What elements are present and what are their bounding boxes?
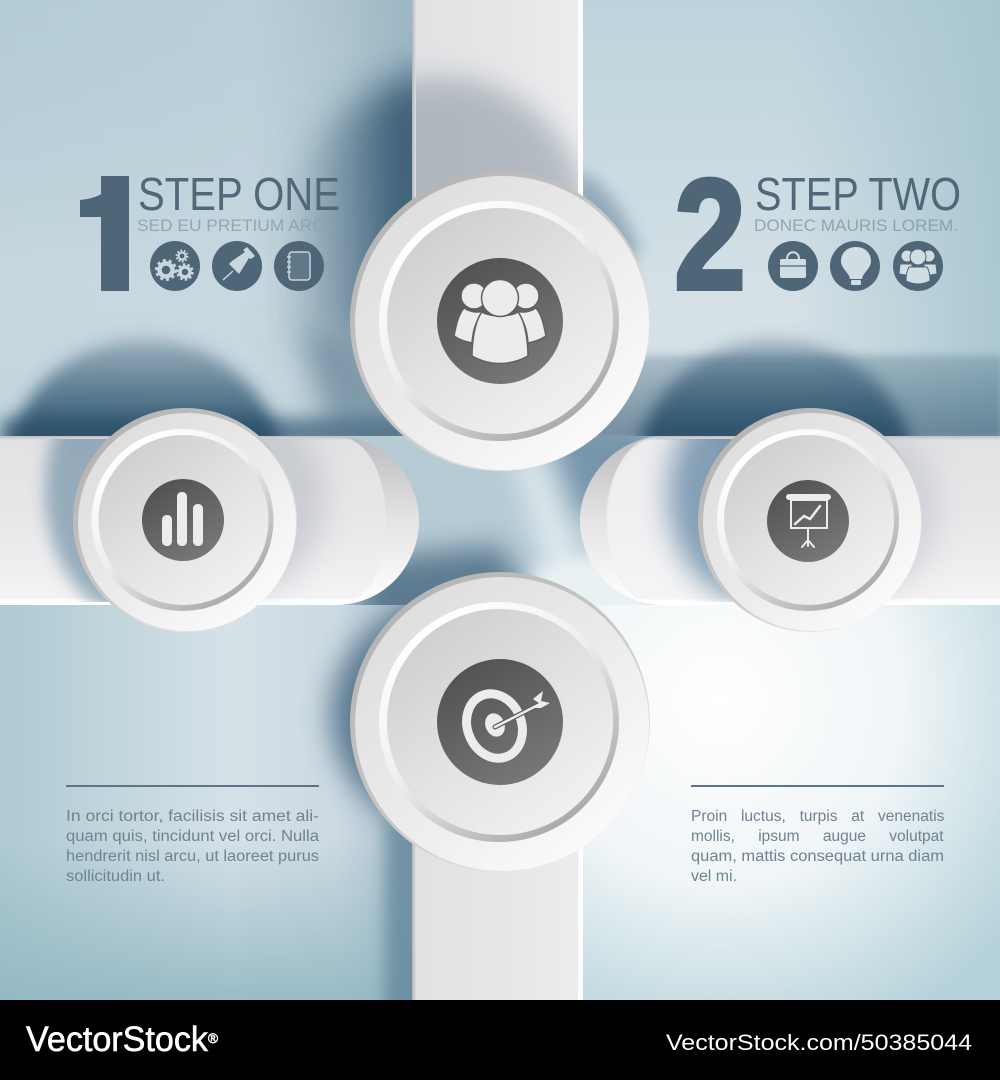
watermark logo: VectorStock® — [26, 1020, 219, 1059]
title: STEP TWO — [755, 168, 961, 220]
icon: gears — [150, 241, 200, 291]
bottom circle button — [350, 572, 650, 872]
icon: briefcase — [768, 241, 818, 291]
text block: right: quam, mattis consequat urna diam — [691, 848, 944, 865]
text block: left: quam quis, tincidunt vel orci. Nulla — [66, 828, 319, 845]
number 2: 2 — [674, 147, 746, 323]
left strip — [0, 436, 419, 605]
icon: push pin — [212, 241, 262, 291]
shadow: top circle, right — [583, 166, 646, 264]
text block: left: hendrerit nisl arcu, ut laoreet purus — [66, 848, 319, 865]
right strip — [580, 436, 1000, 605]
subtitle: DONEC MAURIS LOREM. — [754, 216, 958, 235]
title: STEP ONE — [138, 168, 340, 220]
vertical strip top — [412, 0, 583, 300]
shadow: right circle — [596, 330, 1000, 436]
icon: bar chart — [162, 492, 203, 546]
icon: people — [893, 241, 943, 291]
heading: step two — [674, 147, 961, 323]
text block: right: mollis, ipsum augue volutpat — [691, 828, 944, 845]
shadow: top circle, left — [271, 46, 412, 432]
watermark url: VectorStock.com/50385044 — [666, 1030, 972, 1055]
icon: target with arrow — [457, 685, 550, 767]
subtitle: SED EU PRETIUM ARCU. — [137, 216, 342, 235]
center area — [340, 436, 657, 605]
icon: presentation board — [786, 494, 831, 547]
vertical strip shadow — [416, 64, 578, 196]
text block: right: Proin luctus, turpis at venenatis — [691, 808, 945, 825]
divider: right — [691, 785, 944, 787]
text block: right: vel mi. — [691, 868, 737, 885]
footer bar — [0, 1000, 1000, 1080]
shadow: bottom circle, left — [311, 605, 412, 1000]
text block: left: In orci tortor, facilisis sit amet ali- — [66, 808, 319, 825]
vertical strip bottom — [412, 770, 583, 1000]
icon: light bulb — [830, 241, 880, 291]
strip shadows — [34, 439, 333, 602]
icon: notebook — [274, 241, 324, 291]
text block: left: sollicitudin ut. — [66, 868, 165, 885]
number 1: 1 — [64, 143, 155, 326]
heading: step one — [80, 176, 340, 291]
shadow: left circle — [0, 330, 404, 436]
icon: group of people — [454, 280, 546, 364]
strip shadows — [608, 439, 944, 602]
top circle button — [350, 171, 650, 471]
left circle button — [73, 408, 297, 632]
divider: left — [66, 785, 319, 787]
right circle button — [698, 408, 922, 632]
text block: left — [66, 808, 319, 885]
number 1 — [80, 176, 129, 291]
text block: right — [691, 808, 945, 885]
